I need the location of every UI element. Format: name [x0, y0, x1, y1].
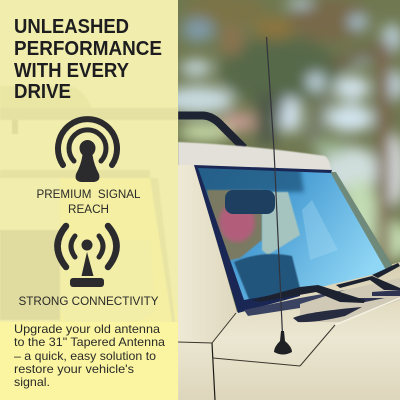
heading — [14, 16, 162, 103]
label: strong connectivity: STRONG CONNECTIVITY — [18, 294, 158, 308]
antenna mast — [266, 37, 282, 335]
panel: yellow overlay — [0, 0, 178, 400]
antenna base — [274, 331, 292, 354]
heading: WITH EVERY — [14, 60, 130, 82]
ghost photo shapes behind the tint — [0, 86, 178, 400]
heading: UNLEASHED — [14, 16, 129, 38]
description text: signal. — [14, 375, 50, 389]
car: cowl strip — [244, 280, 400, 316]
label: premium signal reach — [36, 189, 141, 216]
car: dark upper glass band — [194, 166, 304, 192]
description text: – a quick, easy solution to — [14, 349, 156, 363]
car: pink blossoms — [219, 202, 255, 242]
car: panel seams — [178, 313, 335, 400]
description text: Upgrade your old antenna — [14, 322, 160, 336]
description text: restore your vehicle's — [14, 362, 134, 376]
blurred background: trees and sky — [162, 0, 400, 400]
car: roof — [178, 142, 331, 172]
heading: DRIVE — [14, 81, 71, 103]
car: rear-view mirror — [225, 190, 275, 214]
car: windshield frame — [194, 165, 332, 313]
car: flowers reflection — [207, 190, 262, 262]
car: hood crease — [335, 298, 400, 325]
description text — [14, 322, 165, 389]
car: wipers — [252, 263, 400, 303]
icon: antenna tower with waves — [58, 226, 116, 287]
car: hood vent — [293, 307, 362, 322]
car: bright streak — [302, 200, 338, 260]
car: roof rail — [178, 116, 244, 148]
icon: signal broadcast pin — [58, 119, 117, 182]
car — [178, 37, 400, 400]
car: cowl panel — [300, 278, 400, 322]
car: interior reflection — [194, 166, 338, 302]
car: pale building reflection — [262, 192, 300, 255]
car: windshield edge trim — [330, 172, 394, 270]
car: hood — [178, 262, 400, 400]
description text: to the 31" Tapered Antenna — [14, 335, 165, 349]
car: door pillar — [178, 165, 237, 343]
car: windshield — [196, 167, 392, 310]
heading: PERFORMANCE — [14, 38, 162, 60]
car: seat reflection — [234, 254, 300, 302]
label: premium signal reach: PREMIUM SIGNAL — [36, 189, 141, 201]
label: premium signal reach: REACH — [68, 204, 109, 216]
car: cowl dark slots — [345, 290, 400, 302]
